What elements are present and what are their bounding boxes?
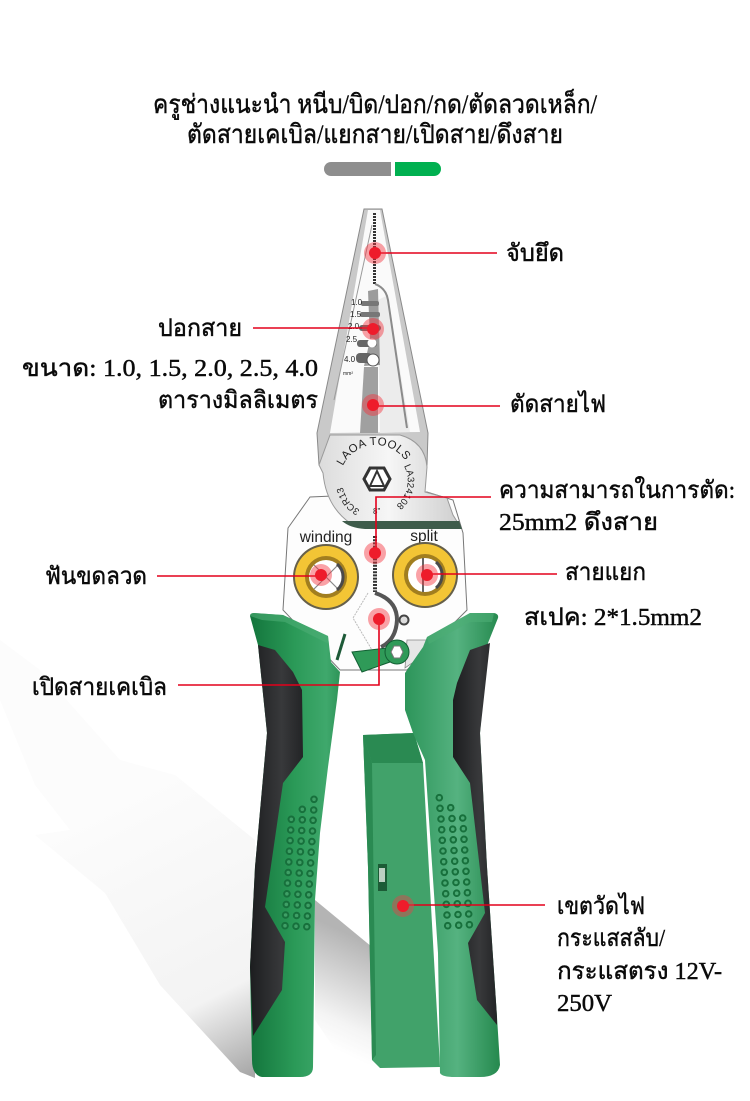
callout: winding teeth: ฟันขดลวด [45, 564, 147, 590]
callout: cut wire: ตัดสายไฟ [510, 390, 606, 418]
callout: voltage test zone: 250V [557, 991, 613, 1017]
callout: winding teeth [45, 564, 332, 590]
callout: voltage test zone [392, 892, 722, 1017]
hole: winding [293, 529, 359, 610]
head plate: 3CR13 [336, 488, 359, 515]
callout: cutting capacity: ความสามารถในการตัด: [499, 476, 735, 504]
gauge numbers: mm² [343, 371, 353, 377]
title: ตัดสายเคเบิล/แยกสาย/เปิดสาย/ดึงสาย [187, 120, 563, 149]
title: ครูช่างแนะนำ หนีบ/บิด/ปอก/กด/ตัดลวดเหล็ก/ [153, 88, 598, 120]
callout: voltage test zone: กระแสสลับ/ [557, 926, 665, 952]
stripping notches [356, 289, 381, 366]
head plate: LA324108 [397, 464, 414, 510]
pivot latch [352, 640, 409, 672]
tool: pliers [250, 208, 500, 1077]
icon: brand hexagon logo [364, 468, 390, 490]
hole: split: split [410, 528, 438, 545]
cutter serration and crimp [353, 536, 408, 650]
head plate: 8" [373, 507, 380, 516]
callout: voltage test zone: กระแสตรง 12V- [557, 959, 722, 985]
hole: split [392, 528, 458, 608]
callout: voltage test zone: เขตวัดไฟ [557, 892, 645, 920]
callout: split wire [416, 560, 702, 631]
progress pill divider [324, 162, 441, 176]
callout: cutting capacity [364, 476, 735, 564]
head plate [318, 434, 462, 529]
gauge numbers: 2.5 [346, 335, 358, 344]
gauge numbers: 1.5 [350, 310, 362, 319]
callout: split wire: สเปค: 2*1.5mm2 [524, 605, 702, 631]
lower body steel [283, 492, 467, 670]
callout: split wire: สายแยก [565, 560, 646, 586]
callout: strip wire [158, 316, 384, 342]
callout: cable opening [32, 608, 390, 701]
callout: cable opening: เปิดสายเคเบิล [32, 675, 167, 701]
gauge numbers: 4.0 [344, 355, 356, 364]
text block: strip sizes [22, 356, 318, 414]
icon: meter indicator [378, 864, 387, 891]
callout: cutting capacity: 25mm2 ดึงสาย [499, 510, 658, 536]
gauge numbers: 1.0 [351, 298, 363, 307]
handle: left [250, 613, 340, 1077]
jaws [317, 209, 428, 465]
text block: strip sizes: ตารางมิลลิเมตร [158, 388, 318, 414]
gauge numbers [343, 298, 363, 377]
callout: cut wire [362, 390, 606, 418]
callout: grip [364, 241, 564, 267]
background: faint tool shadow [0, 640, 376, 1078]
handle: right [405, 613, 500, 1077]
gauge numbers: 2.0 [348, 322, 360, 331]
title [153, 88, 598, 149]
callout: strip wire: ปอกสาย [158, 316, 242, 342]
meter box [363, 733, 440, 1068]
callout: grip: จับยึด [506, 241, 564, 267]
hole: winding: winding [299, 529, 352, 546]
text block: strip sizes: ขนาด: 1.0, 1.5, 2.0, 2.5, 4.0 [22, 356, 318, 382]
head plate: LAOA TOOLS [336, 436, 410, 466]
